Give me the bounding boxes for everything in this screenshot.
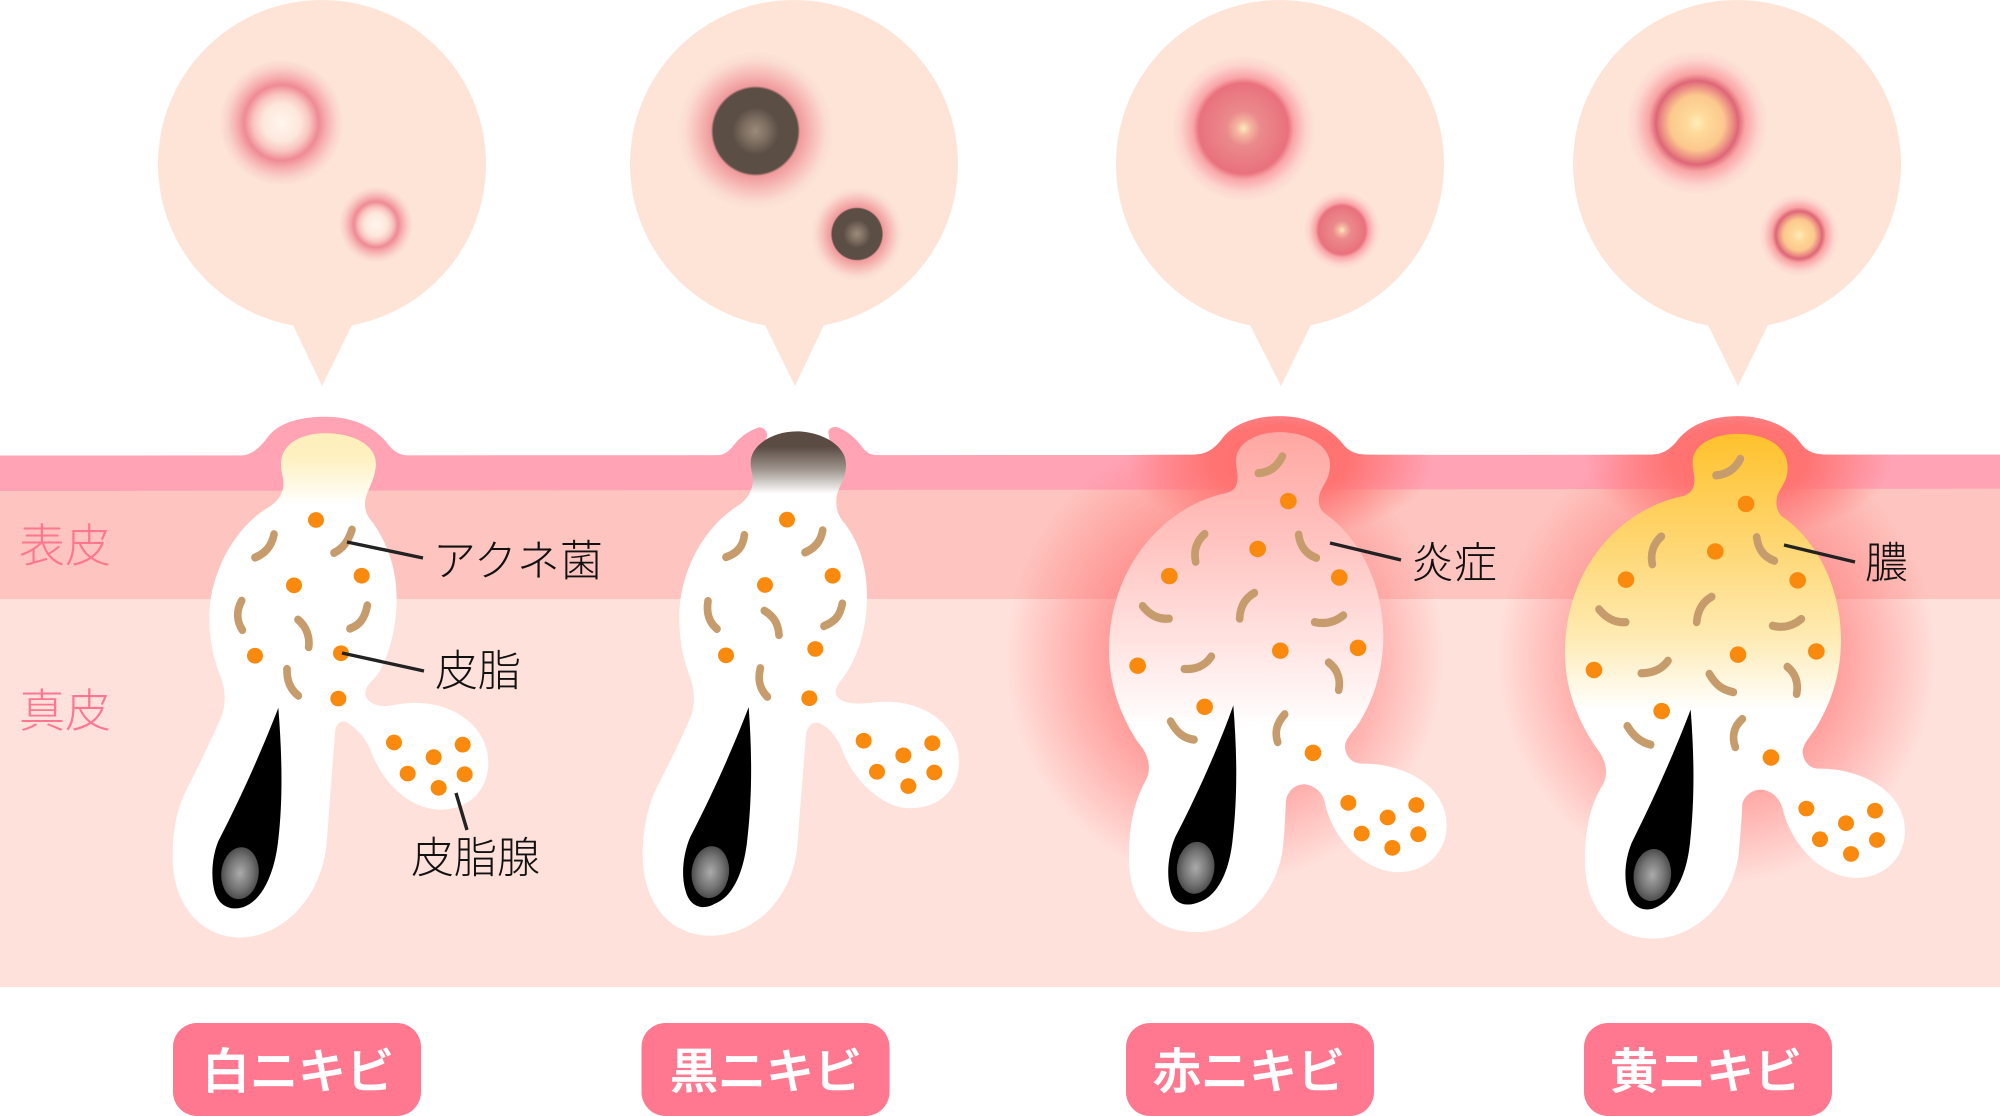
layer label: dermis: 真皮 bbox=[19, 685, 111, 737]
callout: pus: 膿 bbox=[1865, 540, 1908, 588]
speech bubble: black acne skin view bbox=[630, 0, 958, 386]
speech bubble: white acne skin view bbox=[158, 0, 486, 386]
follicle diagram: black acne bbox=[643, 427, 959, 936]
skin layers bbox=[0, 455, 2000, 987]
follicle diagram: red acne bbox=[1005, 382, 1447, 932]
black acne lesion small bbox=[811, 187, 903, 281]
callout: acne bacteria bbox=[347, 538, 603, 586]
white acne lesion small bbox=[339, 186, 413, 262]
yellow acne lesion small bbox=[1759, 194, 1839, 276]
label pill: red acne bbox=[1126, 1023, 1374, 1116]
callout: pus bbox=[1784, 540, 1908, 588]
black acne lesion large bbox=[678, 52, 834, 210]
callout: sebaceous gland: 皮脂腺 bbox=[411, 835, 540, 883]
label pill: red acne: 赤ニキビ bbox=[1153, 1046, 1345, 1099]
follicle diagram: yellow acne bbox=[1508, 416, 1924, 938]
white acne lesion large bbox=[220, 60, 344, 186]
label pill: yellow acne bbox=[1584, 1023, 1832, 1116]
callout: sebum bbox=[342, 648, 521, 696]
label pill: black acne bbox=[642, 1023, 890, 1116]
speech bubble: red acne skin view bbox=[1116, 0, 1444, 386]
callout: sebaceous gland bbox=[411, 793, 540, 883]
label pill: white acne bbox=[173, 1023, 421, 1116]
label pill: white acne: 白ニキビ bbox=[202, 1046, 394, 1099]
layer label: epidermis: 表皮 bbox=[19, 520, 111, 572]
red acne lesion large bbox=[1172, 55, 1316, 201]
label pill: black acne: 黒ニキビ bbox=[670, 1046, 862, 1099]
speech bubble: yellow acne skin view bbox=[1573, 0, 1901, 386]
callout: acne bacteria: アクネ菌 bbox=[433, 538, 603, 586]
callout: sebum: 皮脂 bbox=[435, 648, 521, 696]
yellow acne lesion large bbox=[1626, 51, 1768, 195]
follicle diagram: white acne bbox=[173, 417, 488, 937]
label pill: yellow acne: 黄ニキビ bbox=[1610, 1046, 1802, 1099]
callout: inflammation: 炎症 bbox=[1411, 540, 1497, 588]
red acne lesion small bbox=[1304, 191, 1380, 269]
callout: inflammation bbox=[1330, 540, 1497, 588]
